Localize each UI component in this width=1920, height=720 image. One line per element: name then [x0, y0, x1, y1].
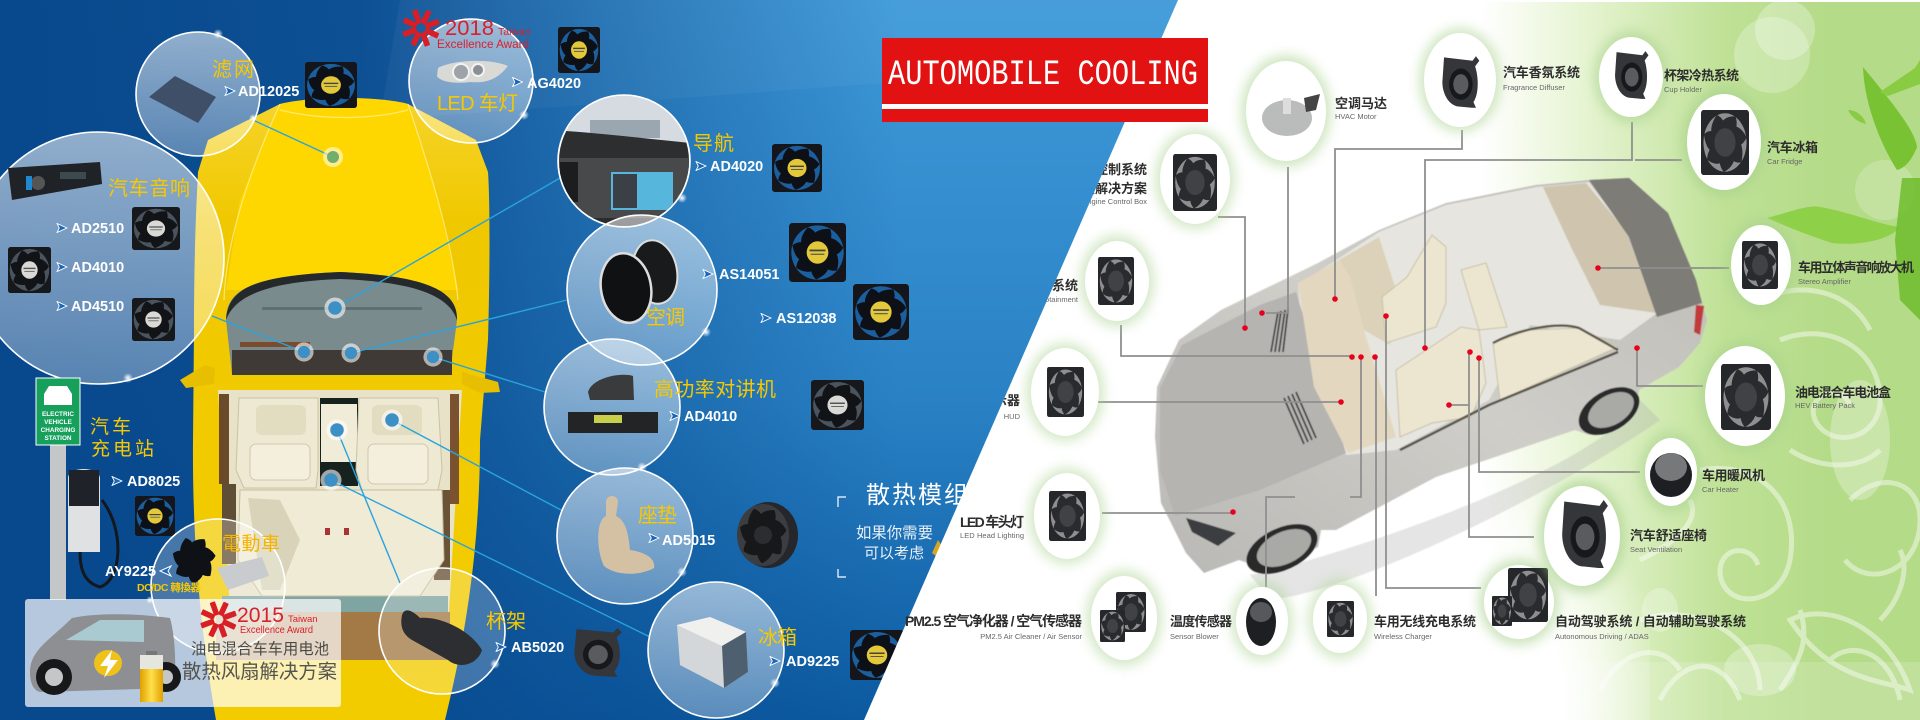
- HUD label: [1000, 394, 1020, 419]
- fan AD4010: [811, 380, 864, 430]
- battery label: HEV Battery Pack: [1795, 401, 1855, 410]
- fan AS12038: [853, 284, 909, 340]
- car body: [193, 98, 490, 720]
- panel: hybrid battery fan solution: [25, 599, 341, 707]
- callout lines with red dots: [1098, 122, 1729, 596]
- fan AD9225: [850, 630, 904, 680]
- bubble: fridge: [648, 582, 904, 718]
- module heading: 散热模组: [866, 482, 970, 509]
- application node: LED head lighting: [960, 468, 1105, 564]
- icon: blower: [1615, 51, 1648, 99]
- icon: two-way radio: [568, 375, 658, 433]
- stereo label: 车用立体声音响放大机: [1798, 260, 1914, 275]
- heater label: [1702, 468, 1765, 494]
- HVAC label: [1335, 96, 1387, 121]
- charging station label: [90, 416, 154, 460]
- icon: fan: [1701, 110, 1749, 175]
- car fridge label: 汽车冰箱: [1767, 140, 1818, 155]
- icon: motor: [1262, 94, 1320, 136]
- HVAC label: 空调马达: [1335, 96, 1387, 111]
- panel line 2: 散热风扇解决方案: [182, 661, 337, 683]
- front wheel: [1239, 514, 1325, 584]
- charging station label: 充电站: [91, 438, 154, 460]
- dark rear roof: [1589, 178, 1702, 317]
- wireless label: [1374, 614, 1476, 641]
- front headlight: [1186, 518, 1236, 546]
- pole: [50, 445, 66, 600]
- ADAS label: 自动驾驶系统 / 自动辅助驾驶系统: [1555, 614, 1746, 629]
- green floral background: [1499, 2, 1920, 720]
- icon: impeller: [173, 537, 216, 584]
- seat ventilation label: 汽车舒适座椅: [1630, 528, 1707, 543]
- icon: dashboard navigation screen: [559, 120, 689, 226]
- PM2.5 label: PM2.5 空气净化器 / 空气传感器: [905, 613, 1082, 629]
- application node: HVAC motor: [1241, 55, 1387, 167]
- tail light: [1694, 305, 1704, 335]
- model AG4020: AG4020: [527, 76, 581, 92]
- model AS12038: AS12038: [776, 311, 836, 327]
- front right seat: [356, 398, 442, 490]
- icon: fans: [1100, 592, 1146, 642]
- application node: infotainment: [1046, 230, 1160, 332]
- radio label: 高功率对讲机: [654, 378, 776, 401]
- grille vents: [1271, 309, 1316, 444]
- title banner: [882, 38, 1208, 122]
- application node: fragrance diffuser: [1419, 28, 1580, 132]
- bubble: LED headlamp: [402, 9, 600, 143]
- charger unit: [68, 469, 118, 587]
- model AD4010: AD4010: [684, 409, 737, 425]
- filter label: 滤 网: [212, 58, 254, 81]
- yellow convertible car, top view: [180, 98, 500, 720]
- LED head label: [960, 514, 1024, 540]
- bubble: air filter: [136, 32, 357, 156]
- bubble: seat: [557, 468, 798, 604]
- brackets: [838, 497, 846, 577]
- interior: [216, 390, 462, 660]
- icon: blower: [1562, 500, 1608, 568]
- wireless label: 车用无线充电系统: [1374, 614, 1476, 629]
- car fridge label: Car Fridge: [1767, 157, 1802, 166]
- HUD label: HUD: [1004, 412, 1021, 421]
- car shadow: [1250, 400, 1660, 600]
- car fridge label: [1767, 140, 1818, 166]
- blower AB5020: [574, 628, 622, 677]
- application node: autonomous driving: [1479, 559, 1746, 645]
- application node: sensor blower: [1170, 581, 1293, 661]
- silver car cutaway: [1155, 178, 1707, 600]
- axial fan AD5015: [737, 502, 798, 568]
- fridge label: 冰箱: [758, 626, 797, 649]
- air conditioning label: 空调: [646, 306, 685, 329]
- seat ventilation label: Seat Ventilation: [1630, 545, 1682, 554]
- infotainment label: 信息娱乐系统: [1000, 278, 1078, 293]
- cup holder label: Cup Holder: [1664, 85, 1702, 94]
- icon: cabin filter: [149, 76, 216, 123]
- stereo label: [1798, 260, 1914, 286]
- hot spot markers on car: [294, 147, 443, 491]
- model AD4510: AD4510: [71, 299, 124, 315]
- bubble: car audio: [0, 132, 224, 384]
- application node: seat ventilation: [1539, 480, 1707, 592]
- hood crease lines: [224, 104, 458, 300]
- sign: electric vehicle charging station: STATION: [44, 435, 72, 442]
- icon: car seat: [598, 496, 654, 574]
- rear window: [1543, 183, 1657, 313]
- seats: [1382, 235, 1618, 437]
- icon: blower: [1442, 56, 1479, 108]
- LED lamp label: LED 车灯: [437, 92, 518, 115]
- fragrance label: 汽车香氛系统: [1503, 65, 1580, 80]
- bubble: air conditioning: [567, 215, 909, 365]
- application node: engine control box: [1056, 129, 1235, 229]
- wireless label: Wireless Charger: [1374, 632, 1432, 641]
- application node: cup holder: [1594, 31, 1739, 123]
- hood glass: [1160, 292, 1346, 516]
- charging station: [36, 378, 180, 600]
- hood panel: [226, 98, 458, 290]
- sign: electric vehicle charging station: VEHICLE: [44, 419, 73, 426]
- icon: fan: [1173, 154, 1217, 211]
- ADAS label: [1555, 614, 1746, 641]
- icon: air vents: [595, 237, 682, 327]
- award 2015: [200, 601, 318, 638]
- sign: electric vehicle charging station: CHARGING: [41, 427, 75, 434]
- bubble: high power radio: [544, 339, 864, 475]
- icon: battery: [140, 651, 163, 702]
- icon: fan: [1049, 491, 1086, 541]
- stereo label: Stereo Amplifier: [1798, 277, 1851, 286]
- icon: portable fridge: [677, 617, 748, 688]
- white diagonal panel: [864, 0, 1920, 720]
- fragrance label: Fragrance Diffuser: [1503, 83, 1565, 92]
- application node: car heater: [1640, 432, 1765, 512]
- HVAC label: HVAC Motor: [1335, 112, 1377, 121]
- bamboo leaves: [1767, 60, 1920, 320]
- award 2015: Taiwan: [288, 614, 318, 625]
- fan AD4020: [772, 144, 822, 192]
- sign: electric vehicle charging station: ELECTRIC: [42, 411, 74, 418]
- electric vehicle label: 電動車: [222, 533, 280, 555]
- LED head label: LED 车头灯: [960, 514, 1024, 530]
- bubble: cup holder: [379, 568, 622, 694]
- module text line 2: 可以考虑: [864, 545, 924, 562]
- engine control label: 散热解决方案: [1069, 181, 1147, 196]
- bubble: navigation: [550, 95, 822, 240]
- icon: fan: [1047, 367, 1084, 417]
- seat ventilation label: [1630, 528, 1707, 554]
- ADAS label: Autonomous Driving / ADAS: [1555, 632, 1649, 641]
- DC/DC converter label: DC/DC 轉換器: [137, 581, 202, 594]
- application node: wireless charger: [1308, 579, 1476, 659]
- icon: hybrid car: [30, 614, 181, 695]
- icon: fan: [1721, 364, 1771, 430]
- fan AD2510: [132, 207, 180, 250]
- panel line 1: 油电混合车车用电池: [191, 641, 329, 658]
- cup holder label: 杯架: [486, 610, 526, 633]
- application node: HUD: [1000, 338, 1110, 446]
- model AS14051: AS14051: [719, 267, 779, 283]
- heat-sink module teaser: [838, 482, 970, 577]
- module text: 如果你需要: [856, 524, 933, 542]
- cup holder label: 杯架冷热系统: [1664, 68, 1739, 83]
- fan AS14051: [789, 223, 846, 282]
- audio label: 汽车音响: [108, 177, 190, 200]
- icon: cup holder: [401, 610, 482, 665]
- award 2015: 2015: [237, 604, 284, 627]
- side window frame: [1400, 326, 1618, 450]
- model AY9225: AY9225: [105, 564, 156, 580]
- connector lines from car to bubbles: [212, 120, 650, 637]
- rear wheel: [1570, 377, 1648, 445]
- model AD5015: AD5015: [662, 533, 715, 549]
- fan AD4010: [8, 247, 51, 293]
- model AD2510: AD2510: [71, 221, 124, 237]
- icon: fan: [1098, 257, 1134, 305]
- model AD4010: AD4010: [71, 260, 124, 276]
- sparkles on bubble edges: [123, 29, 780, 688]
- gold accent: [932, 540, 942, 556]
- battery label: 油电混合车电池盒: [1795, 385, 1891, 400]
- engine control label: [1090, 162, 1147, 206]
- cup holder label: [1664, 68, 1739, 94]
- award 2018: [402, 9, 531, 51]
- PM2.5 label: PM2.5 Air Cleaner / Air Sensor: [980, 632, 1082, 641]
- award 2015: Excellence Award: [240, 624, 313, 636]
- car body shell: [1155, 178, 1707, 573]
- icon: blower wheel: [1246, 598, 1276, 646]
- HUD label: 抬头显示器: [955, 393, 1020, 408]
- model AB5020: AB5020: [511, 640, 564, 656]
- application node: stereo amplifier: [1726, 219, 1914, 311]
- award 2018: Excellence Award: [437, 37, 529, 51]
- heater label: Car Heater: [1702, 485, 1739, 494]
- side mirrors: [180, 365, 500, 393]
- windshield: [226, 272, 457, 375]
- model AD8025: AD8025: [127, 474, 180, 490]
- award 2018: 2018: [445, 17, 494, 40]
- title text: AUTOMOBILE COOLING: [888, 54, 1198, 95]
- icon: fan: [1327, 601, 1354, 637]
- dash and cream panel: [1339, 237, 1396, 345]
- battery label: [1795, 385, 1891, 410]
- front left seat: [236, 398, 318, 488]
- infotainment label: [1046, 278, 1078, 302]
- heater label: 车用暖风机: [1702, 468, 1765, 483]
- charging station label: 汽车: [90, 416, 131, 438]
- fan AD4510: [132, 298, 175, 341]
- engine control label: 发动机控制系统: [1056, 162, 1147, 177]
- sensor label: [1170, 614, 1232, 641]
- center console: [321, 404, 357, 462]
- application node: PM2.5: [905, 570, 1162, 666]
- icon: blower wheel: [1650, 453, 1692, 497]
- bubble: electric vehicle: [105, 519, 285, 653]
- PM2.5 label: [905, 613, 1082, 641]
- sign: electric vehicle charging station: [36, 378, 80, 445]
- application node: car fridge: [1682, 88, 1818, 196]
- model AD4020: AD4020: [710, 159, 763, 175]
- sensor label: Sensor Blower: [1170, 632, 1219, 641]
- application node: HEV battery pack: [1700, 340, 1891, 452]
- navigation label: 导航: [693, 132, 734, 155]
- icon: DC/DC converter: [217, 557, 269, 590]
- blue background: [0, 0, 1200, 720]
- engine control label: Engine Control Box: [1082, 197, 1147, 206]
- LED head label: LED Head Lighting: [960, 531, 1024, 540]
- icon: fan: [1742, 241, 1778, 289]
- fragrance label: [1503, 65, 1580, 92]
- infotainment label: Infotainment: [1037, 295, 1079, 304]
- seat label: 座垫: [638, 504, 677, 527]
- award 2018: Taiwan: [498, 26, 531, 38]
- model AD12025: AD12025: [238, 84, 299, 100]
- rear bench seat: [238, 490, 444, 596]
- fan AG4020: [558, 27, 600, 73]
- transparent cabin: [1298, 182, 1657, 455]
- fan AD8025: [135, 496, 175, 536]
- front windshield: [1298, 260, 1396, 453]
- sensor label: 温度传感器: [1170, 614, 1232, 629]
- icon: fans: [1492, 568, 1548, 626]
- fan AD12025: [305, 62, 357, 108]
- model AD9225: AD9225: [786, 654, 839, 670]
- icon: car stereo: [8, 162, 102, 200]
- icon: headlamp: [437, 61, 508, 83]
